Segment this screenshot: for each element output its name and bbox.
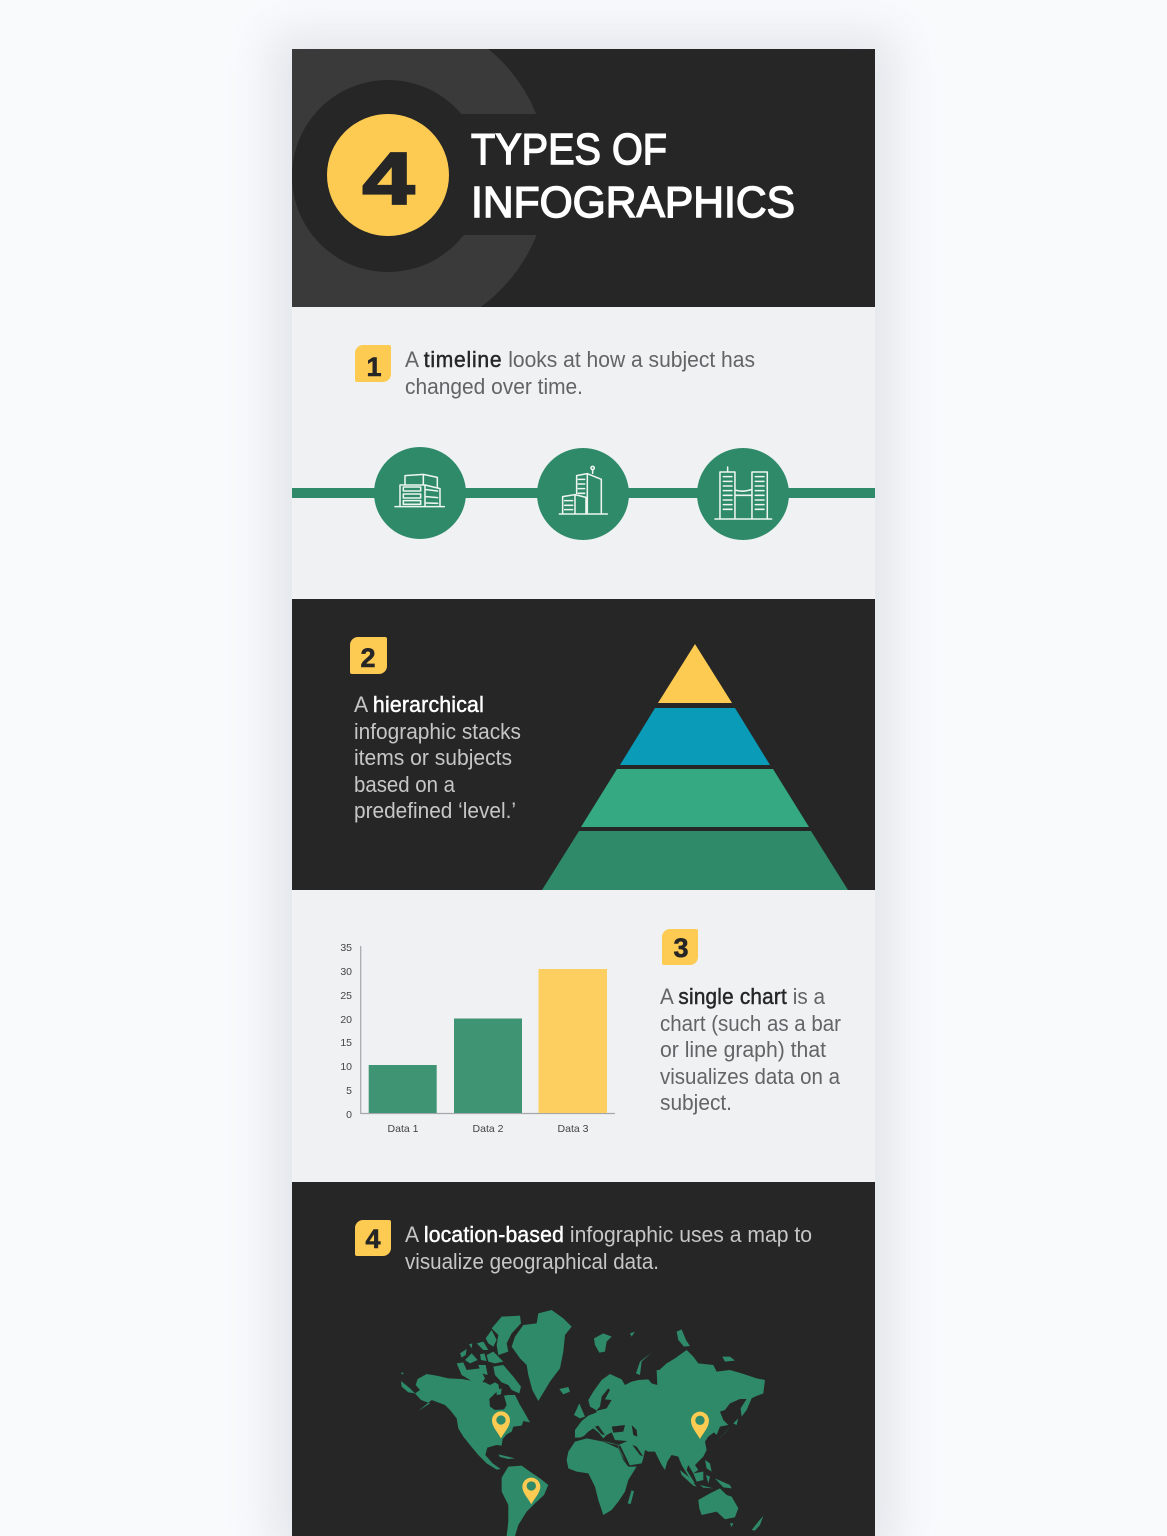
y axis labels: 10: [340, 1061, 352, 1073]
japan: [715, 1427, 730, 1442]
title: [471, 125, 795, 227]
mediterranean sea: [582, 1428, 627, 1445]
hierarchical description: [354, 692, 521, 823]
caribbean: [498, 1454, 515, 1459]
title: TYPES OF: [471, 125, 667, 174]
single chart description: or line graph) that: [660, 1037, 826, 1062]
timeline description: [405, 347, 755, 399]
north america: [415, 1374, 530, 1470]
single chart description: chart (such as a bar: [660, 1011, 841, 1036]
title: INFOGRAPHICS: [471, 178, 795, 227]
location description: [405, 1222, 812, 1274]
yellow number circle: [327, 114, 449, 236]
map pin: north america: [492, 1411, 510, 1438]
africa: [567, 1438, 637, 1515]
panel: location-based: [292, 1182, 875, 1536]
x axis labels: Data 3: [558, 1123, 589, 1135]
bar chart: [340, 942, 615, 1135]
bar: data 3: [538, 969, 607, 1113]
y axis labels: 0: [346, 1109, 352, 1121]
pyramid level 3: [581, 769, 809, 827]
badge 4: [355, 1220, 391, 1256]
caspian sea: [632, 1425, 637, 1437]
world map: [401, 1310, 765, 1536]
pyramid level 2: [620, 708, 770, 765]
panel: single chart: [292, 890, 875, 1182]
y axis labels: 30: [340, 966, 352, 978]
timeline node 3: [697, 448, 789, 540]
baltic sea: [596, 1388, 612, 1411]
map pin: south america: [522, 1478, 540, 1504]
badge 4: 4: [365, 1224, 381, 1254]
hierarchical description: predefined ‘level.’: [354, 798, 516, 823]
panel: header: [292, 49, 875, 307]
eurasia: [575, 1350, 765, 1483]
pyramid: [542, 644, 848, 890]
badge 3: 3: [673, 933, 689, 963]
panel: hierarchical: [292, 599, 875, 890]
map pin: asia: [691, 1412, 709, 1439]
bar: data 1: [369, 1065, 437, 1113]
panel: timeline: [292, 307, 875, 599]
canadian arctic islands: [492, 1316, 521, 1355]
south america: [502, 1466, 548, 1536]
x axis labels: [388, 1123, 589, 1135]
svalbard: [594, 1333, 612, 1353]
badge 3: [662, 929, 698, 965]
southeast asia islands: [680, 1470, 697, 1487]
y axis labels: 25: [340, 990, 352, 1002]
y axis labels: 15: [340, 1037, 352, 1049]
single chart description: A single chart is a: [660, 984, 826, 1009]
new zealand: [752, 1516, 763, 1531]
timeline node 2: [537, 448, 629, 540]
single chart description: subject.: [660, 1090, 732, 1115]
bar: data 2: [454, 1018, 522, 1113]
hierarchical description: based on a: [354, 772, 456, 797]
x axis labels: Data 2: [473, 1123, 504, 1135]
australia: [698, 1488, 738, 1519]
hierarchical description: items or subjects: [354, 745, 512, 770]
hierarchical description: infographic stacks: [354, 719, 521, 744]
seas drawn over land: [582, 1388, 643, 1466]
red sea: [618, 1446, 630, 1466]
hierarchical description: A hierarchical: [354, 692, 484, 717]
timeline description: changed over time.: [405, 374, 583, 399]
black sea: [612, 1425, 625, 1433]
infographic canvas: [265, 27, 902, 1536]
badge 2: 2: [360, 643, 376, 673]
header decorative large ring: [292, 49, 536, 307]
iceland: [559, 1387, 570, 1394]
uk: [574, 1403, 585, 1418]
timeline node 1: [374, 447, 466, 539]
madagascar: [628, 1490, 634, 1504]
location description: A location-based infographic uses a map to: [405, 1222, 812, 1247]
badge 2: [350, 637, 387, 674]
adriatic sea: [595, 1426, 605, 1435]
header dark circle: [292, 80, 464, 272]
persian gulf: [632, 1445, 643, 1457]
single chart description: visualizes data on a: [660, 1064, 841, 1089]
y axis labels: 35: [340, 942, 352, 954]
location description: visualize geographical data.: [405, 1249, 659, 1274]
pyramid level 4: [542, 831, 848, 890]
x axis labels: Data 1: [388, 1123, 419, 1135]
pyramid level 1: [658, 644, 732, 703]
y axis labels: 20: [340, 1014, 352, 1026]
header band behind title: [462, 114, 548, 235]
greenland: [512, 1310, 572, 1401]
timeline description: A timeline looks at how a subject has: [405, 347, 755, 372]
novaya zemlya: [636, 1353, 652, 1375]
badge 1: 1: [366, 352, 382, 382]
y axis labels: [340, 942, 352, 1121]
yellow number circle: 4: [362, 139, 415, 220]
badge 1: [355, 345, 391, 382]
single chart description: [660, 984, 841, 1115]
y axis labels: 5: [346, 1085, 352, 1097]
timeline line: [292, 488, 875, 498]
